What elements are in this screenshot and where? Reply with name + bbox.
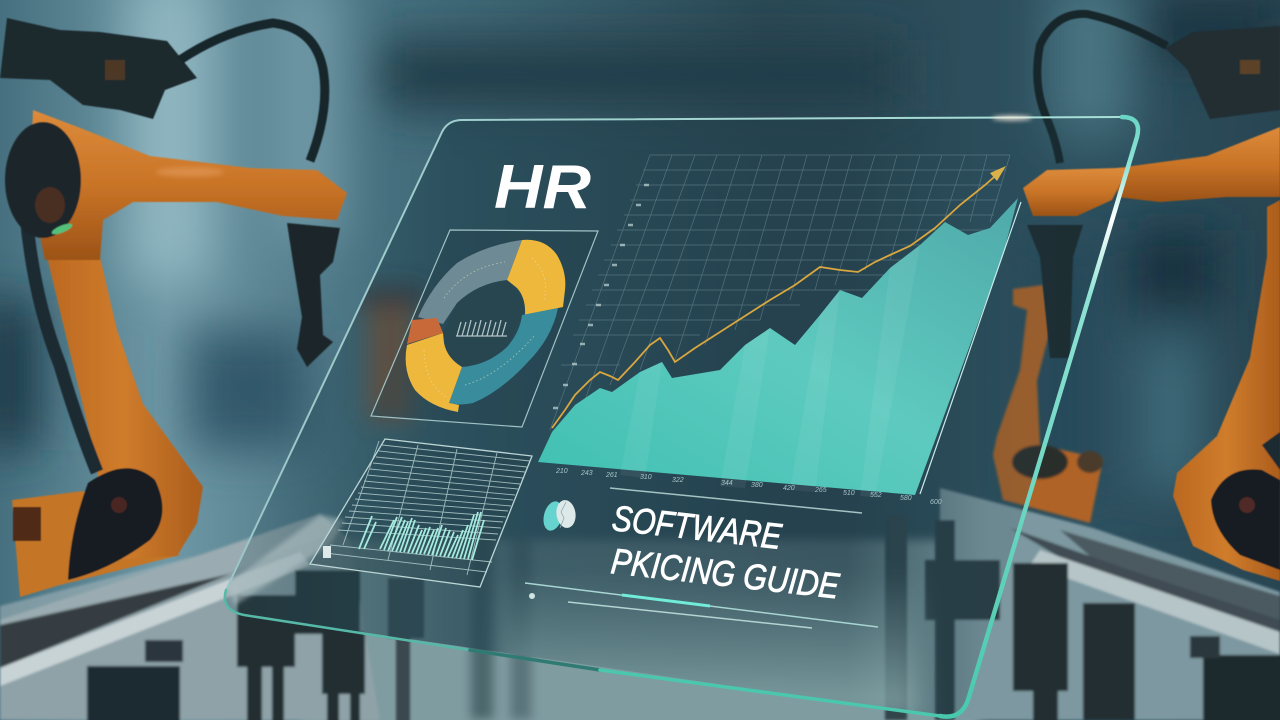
area vertical bands <box>620 245 920 497</box>
orange arm tip in glass <box>1023 168 1128 216</box>
x axis labels: 510 <box>843 490 855 497</box>
lower arm <box>43 240 203 560</box>
camera head <box>1165 26 1280 119</box>
line and area chart <box>538 155 1021 506</box>
donut grey segment <box>418 240 522 324</box>
robot base <box>12 491 180 597</box>
subtitle: software pricing guide: SOFTWARE <box>610 497 784 557</box>
panel border <box>225 117 1138 717</box>
top divider line <box>610 488 862 513</box>
brain-like logo icon <box>540 499 577 533</box>
table and bar panel <box>310 439 532 587</box>
donut teal segment <box>449 308 558 404</box>
x axis labels: 310 <box>640 474 652 481</box>
subtitle: software pricing guide <box>609 497 842 607</box>
lower arm <box>1173 200 1280 581</box>
donut segment text marks <box>424 258 546 398</box>
right robot arm <box>1027 14 1280 581</box>
donut orange segment <box>407 318 443 344</box>
glass panel <box>224 117 1138 720</box>
camera head <box>0 18 197 119</box>
donut yellow bottom segment <box>406 333 462 412</box>
donut centre label <box>456 320 507 336</box>
upper arm <box>30 110 347 260</box>
orange trend line and arrow <box>552 170 1002 428</box>
elbow details <box>35 187 65 223</box>
table bars <box>359 512 484 560</box>
cable <box>1037 14 1167 163</box>
tool <box>287 223 340 367</box>
lens flare <box>992 116 1032 120</box>
tool <box>1027 225 1083 358</box>
x axis labels: 552 <box>870 492 882 499</box>
x axis labels: 380 <box>751 482 763 489</box>
x axis labels: 243 <box>580 470 593 477</box>
donut chart panel <box>371 230 598 427</box>
x axis labels: 322 <box>672 477 684 484</box>
x axis labels: 265 <box>814 487 827 494</box>
x axis labels: 261 <box>605 472 618 479</box>
upper arm highlight <box>156 167 224 177</box>
x axis labels: 344 <box>721 480 733 487</box>
x axis labels: 580 <box>900 495 912 502</box>
x axis labels <box>555 468 942 506</box>
title: HR: HR <box>494 153 591 222</box>
background robot arm on right <box>993 285 1103 523</box>
subtitle: software pricing guide: PKICING GUIDE <box>609 540 842 607</box>
donut hole <box>443 280 523 367</box>
table grid <box>325 441 530 575</box>
area right highlight <box>920 202 1021 494</box>
teal area <box>538 198 1018 495</box>
glass tint <box>224 117 1138 717</box>
cable <box>180 23 325 161</box>
x axis labels: 420 <box>783 485 795 492</box>
left conveyor <box>0 514 424 720</box>
base joint <box>1211 469 1280 570</box>
x axis labels: 600 <box>930 499 942 506</box>
base joint <box>68 468 162 580</box>
y axis ticks <box>553 185 649 408</box>
green light <box>50 222 74 236</box>
table white tag <box>323 546 331 558</box>
conveyor reflection <box>226 515 345 605</box>
elbow joint <box>5 122 81 238</box>
left robot arm <box>0 18 347 597</box>
chart grid <box>550 155 1010 430</box>
lower progress lines <box>525 583 878 628</box>
donut yellow top segment <box>507 240 565 315</box>
lower light fade <box>490 585 930 712</box>
side hose <box>26 215 97 472</box>
bottom machinery floor <box>300 520 980 720</box>
right conveyor <box>885 488 1280 720</box>
base port <box>13 507 41 541</box>
upper arm <box>1117 127 1280 202</box>
ghost reflections <box>355 285 425 420</box>
x axis labels: 210 <box>555 468 568 475</box>
